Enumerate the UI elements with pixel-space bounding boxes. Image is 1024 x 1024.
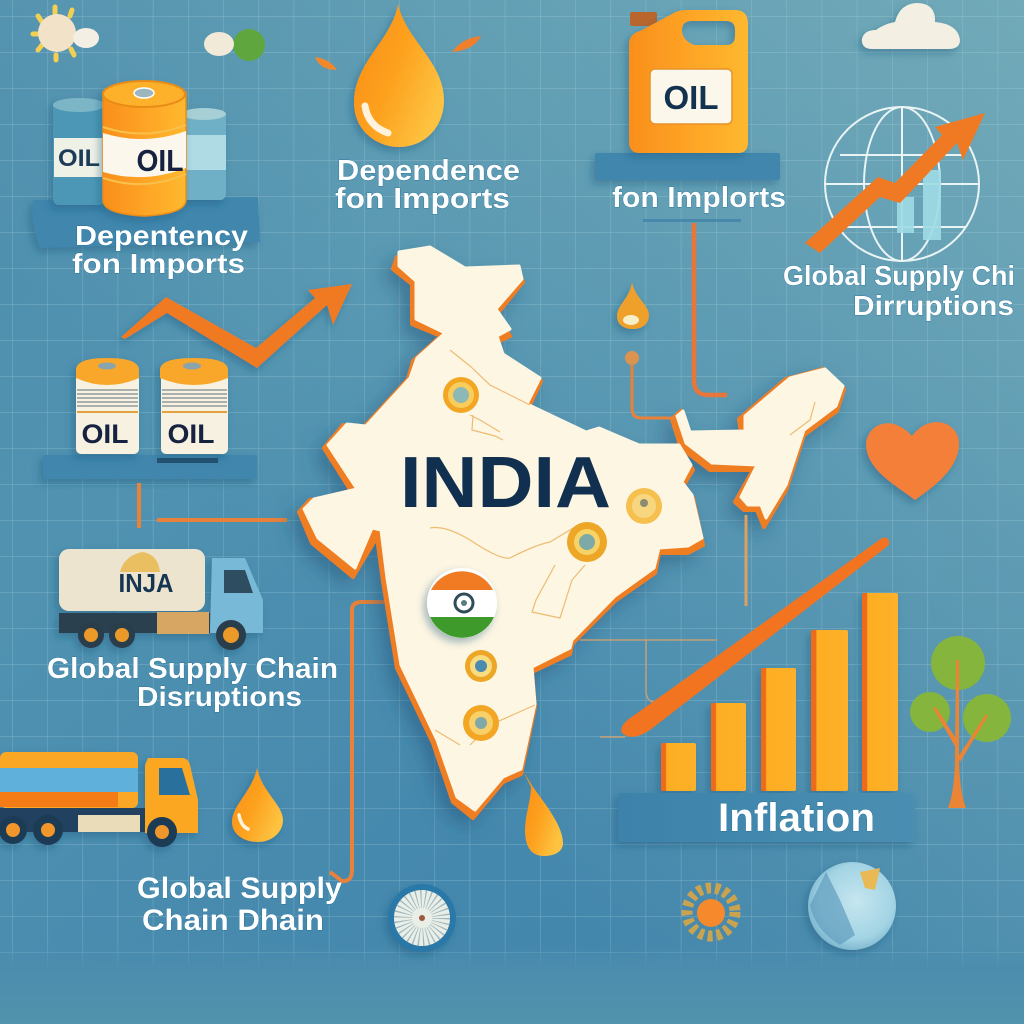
icon: large oil drop [354, 4, 444, 147]
text: dependency on imports: Depentency [75, 220, 248, 251]
text: dependence for imports: fon Imports [335, 183, 510, 215]
jerrycan cap [630, 12, 657, 26]
left can: OIL [82, 419, 128, 449]
map internal borders [430, 350, 815, 745]
text: global supply chain disruptions left: Disruptions [137, 681, 302, 712]
text: global supply chain disruptions top right: Dirruptions [853, 290, 1014, 321]
panel: inflation banner: Inflation [718, 796, 875, 840]
central orange barrel: OIL [136, 143, 184, 178]
icon: compass gauge [388, 884, 456, 952]
text: global supply chain disruptions top right [783, 260, 1015, 321]
map extrusion [299, 248, 844, 818]
text: global supply chain disruptions left: Global Supply Chain [47, 653, 338, 685]
icon: globe with rising arrow [805, 107, 985, 261]
connector line left [139, 483, 287, 528]
text: global supply chain bottom left: Global Supply [137, 872, 342, 905]
icon: tanker truck white [59, 549, 263, 650]
text: global supply chain disruptions left [47, 653, 338, 712]
connector line to inflation chart [580, 640, 717, 737]
connector with pin [625, 351, 674, 418]
icon: small drop near map [617, 282, 649, 329]
text: global supply chain disruptions top right: Global Supply Chi [783, 260, 1015, 291]
map pins [443, 377, 662, 741]
right can: OIL [168, 419, 214, 449]
jerrycan body [629, 10, 748, 153]
icon: globe bottom right [808, 862, 896, 950]
icon: tanker truck orange [0, 752, 198, 847]
left can [76, 358, 139, 454]
icon: small orange leaf 1 [315, 57, 337, 70]
text: dependency on imports: fon Imports [72, 248, 245, 279]
text: dependence for imports: Dependence [337, 155, 520, 187]
right can [160, 358, 228, 454]
central orange barrel [103, 81, 186, 216]
map face [304, 247, 843, 810]
connector line to map from bottom left [330, 602, 384, 881]
icon: tree [910, 636, 1011, 808]
arrow: zigzag rising [121, 284, 352, 368]
panel: twin oil cans on shelf [43, 358, 257, 479]
text: dependence for imports [335, 155, 520, 215]
text: global supply chain bottom left [137, 872, 342, 937]
left blue barrel: OIL [58, 145, 100, 172]
text: global supply chain bottom left: Chain Dhain [142, 904, 324, 937]
icon: oil jerrycan on shelf [595, 10, 780, 180]
jerrycan shelf [595, 153, 780, 180]
icon: cloud top right [862, 3, 960, 49]
icon: sun flower [687, 888, 735, 936]
flag of India badge [427, 568, 497, 638]
panel: inflation banner [618, 793, 915, 842]
panel: oil barrels on shelf [32, 81, 260, 248]
chart: inflation bars [661, 593, 898, 791]
icon: tanker truck white: INJA [118, 568, 174, 598]
icon: oil drop at map tip [523, 771, 563, 856]
arrow: inflation trend line [621, 538, 889, 737]
icon: cloud and green bush [204, 29, 265, 61]
icon: heart [866, 422, 959, 500]
map of India [299, 247, 844, 818]
left blue barrel [53, 98, 105, 205]
icon: oil jerrycan on shelf: OIL [664, 79, 718, 116]
icon: small orange leaf 2 [452, 36, 481, 52]
icon: sun with cloud [33, 7, 99, 60]
text: dependency on imports [72, 220, 248, 279]
connector line right of map [744, 515, 748, 606]
connector line top centre [643, 219, 741, 395]
map title: INDIA [400, 443, 611, 523]
icon: oil drop bottom left [232, 768, 283, 842]
right blue barrel [182, 108, 226, 200]
text: for imports: fon Implorts [612, 182, 786, 214]
